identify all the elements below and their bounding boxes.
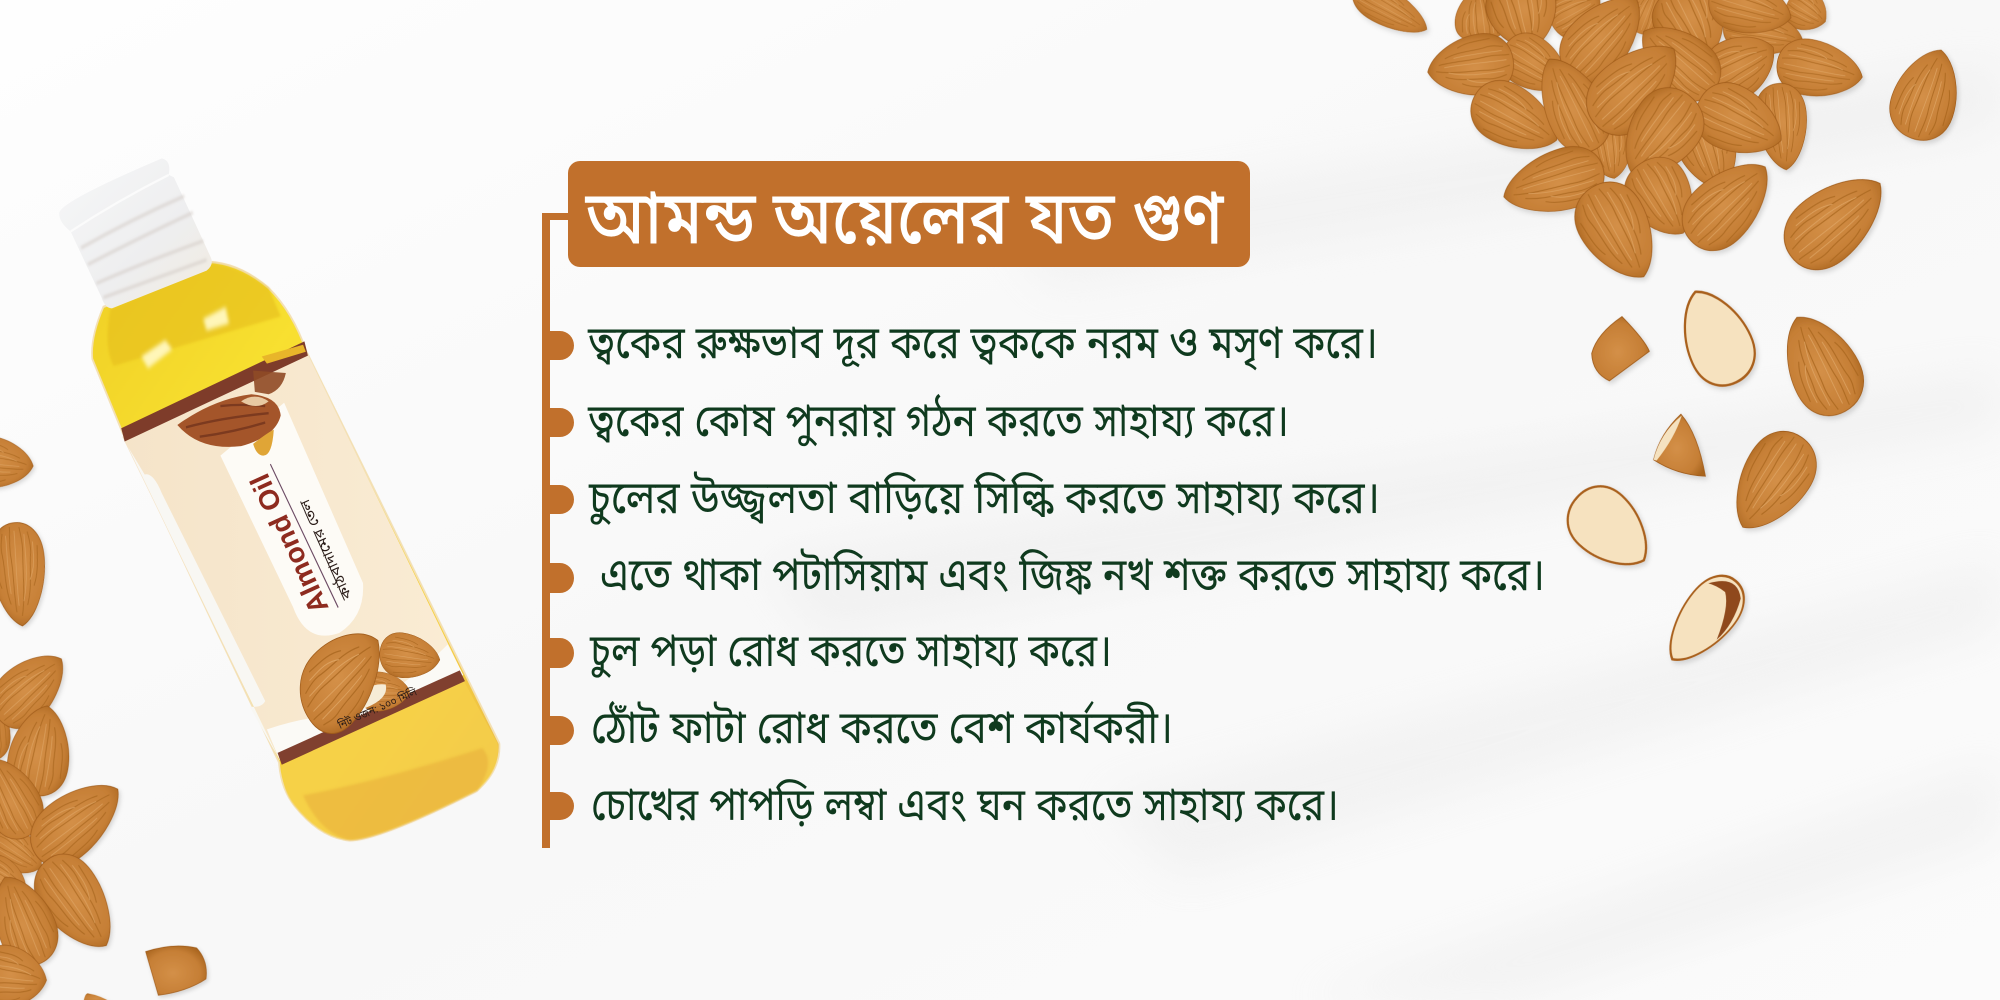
label net weight: নিট ওজন: ১০০ মিলি xyxy=(335,685,420,732)
benefit 2: ত্বকের কোষ পুনরায় গঠন করতে সাহায্য করে। xyxy=(587,393,1289,447)
almond cluster: left edge xyxy=(0,434,206,1000)
label top band xyxy=(121,341,308,441)
label almond top xyxy=(177,371,286,456)
bottle cap xyxy=(59,158,212,308)
benefit 3: চুলের উজ্জ্বলতা বাড়িয়ে সিল্কি করতে সাহায্য করে। xyxy=(588,470,1380,527)
benefit 6: ঠোঁট ফাটা রোধ করতে বেশ কার্যকরী। xyxy=(591,700,1173,753)
timeline rail xyxy=(542,213,570,848)
label subtitle: কাঠবাদামের তেল xyxy=(295,496,355,604)
label bottom band xyxy=(278,670,465,765)
product bottle xyxy=(59,158,499,840)
benefit 4: এতে থাকা পটাসিয়াম এবং জিঙ্ক নখ শক্ত করতে সাহায্য করে। xyxy=(600,547,1545,600)
almond: sliced half lower xyxy=(1555,473,1665,585)
oil highlights xyxy=(141,307,229,368)
benefit 5: চুল পড়া রোধ করতে সাহায্য করে। xyxy=(589,624,1112,680)
almond: broken piece xyxy=(1592,317,1649,381)
label divider line xyxy=(270,464,338,608)
almond: broken bottom xyxy=(146,946,206,995)
almond: whole lower xyxy=(1715,418,1830,547)
almond cluster: top right xyxy=(1346,0,1971,676)
almond: cut off at edge xyxy=(83,993,112,1000)
almond: sliced half bottom xyxy=(1653,564,1755,676)
almond: sliced half xyxy=(1666,278,1765,396)
label side panel xyxy=(128,447,280,760)
almond: loose upper right xyxy=(1881,39,1971,149)
bottle shoulder shading xyxy=(107,263,281,366)
title text: আমন্ড অয়েলের যত গুণ xyxy=(585,176,1224,259)
almond: loose middle xyxy=(1770,156,1902,285)
bottle body: oil xyxy=(92,262,499,840)
label bottom strip xyxy=(267,644,463,760)
almond: wedge xyxy=(1654,414,1705,476)
label xyxy=(121,341,465,765)
label white pill xyxy=(220,403,363,636)
bottle base xyxy=(282,680,498,840)
almond: whole right xyxy=(1767,301,1876,428)
label almonds bottom xyxy=(288,607,441,750)
label title: Almond Oil: Almond Oil xyxy=(244,469,334,618)
title banner xyxy=(568,161,1250,267)
benefit 1: ত্বকের রুক্ষভাব দূর করে ত্বককে নরম ও মসৃণ করে। xyxy=(587,316,1378,371)
benefit 7: চোখের পাপড়ি লম্বা এবং ঘন করতে সাহায্য করে। xyxy=(591,777,1339,830)
